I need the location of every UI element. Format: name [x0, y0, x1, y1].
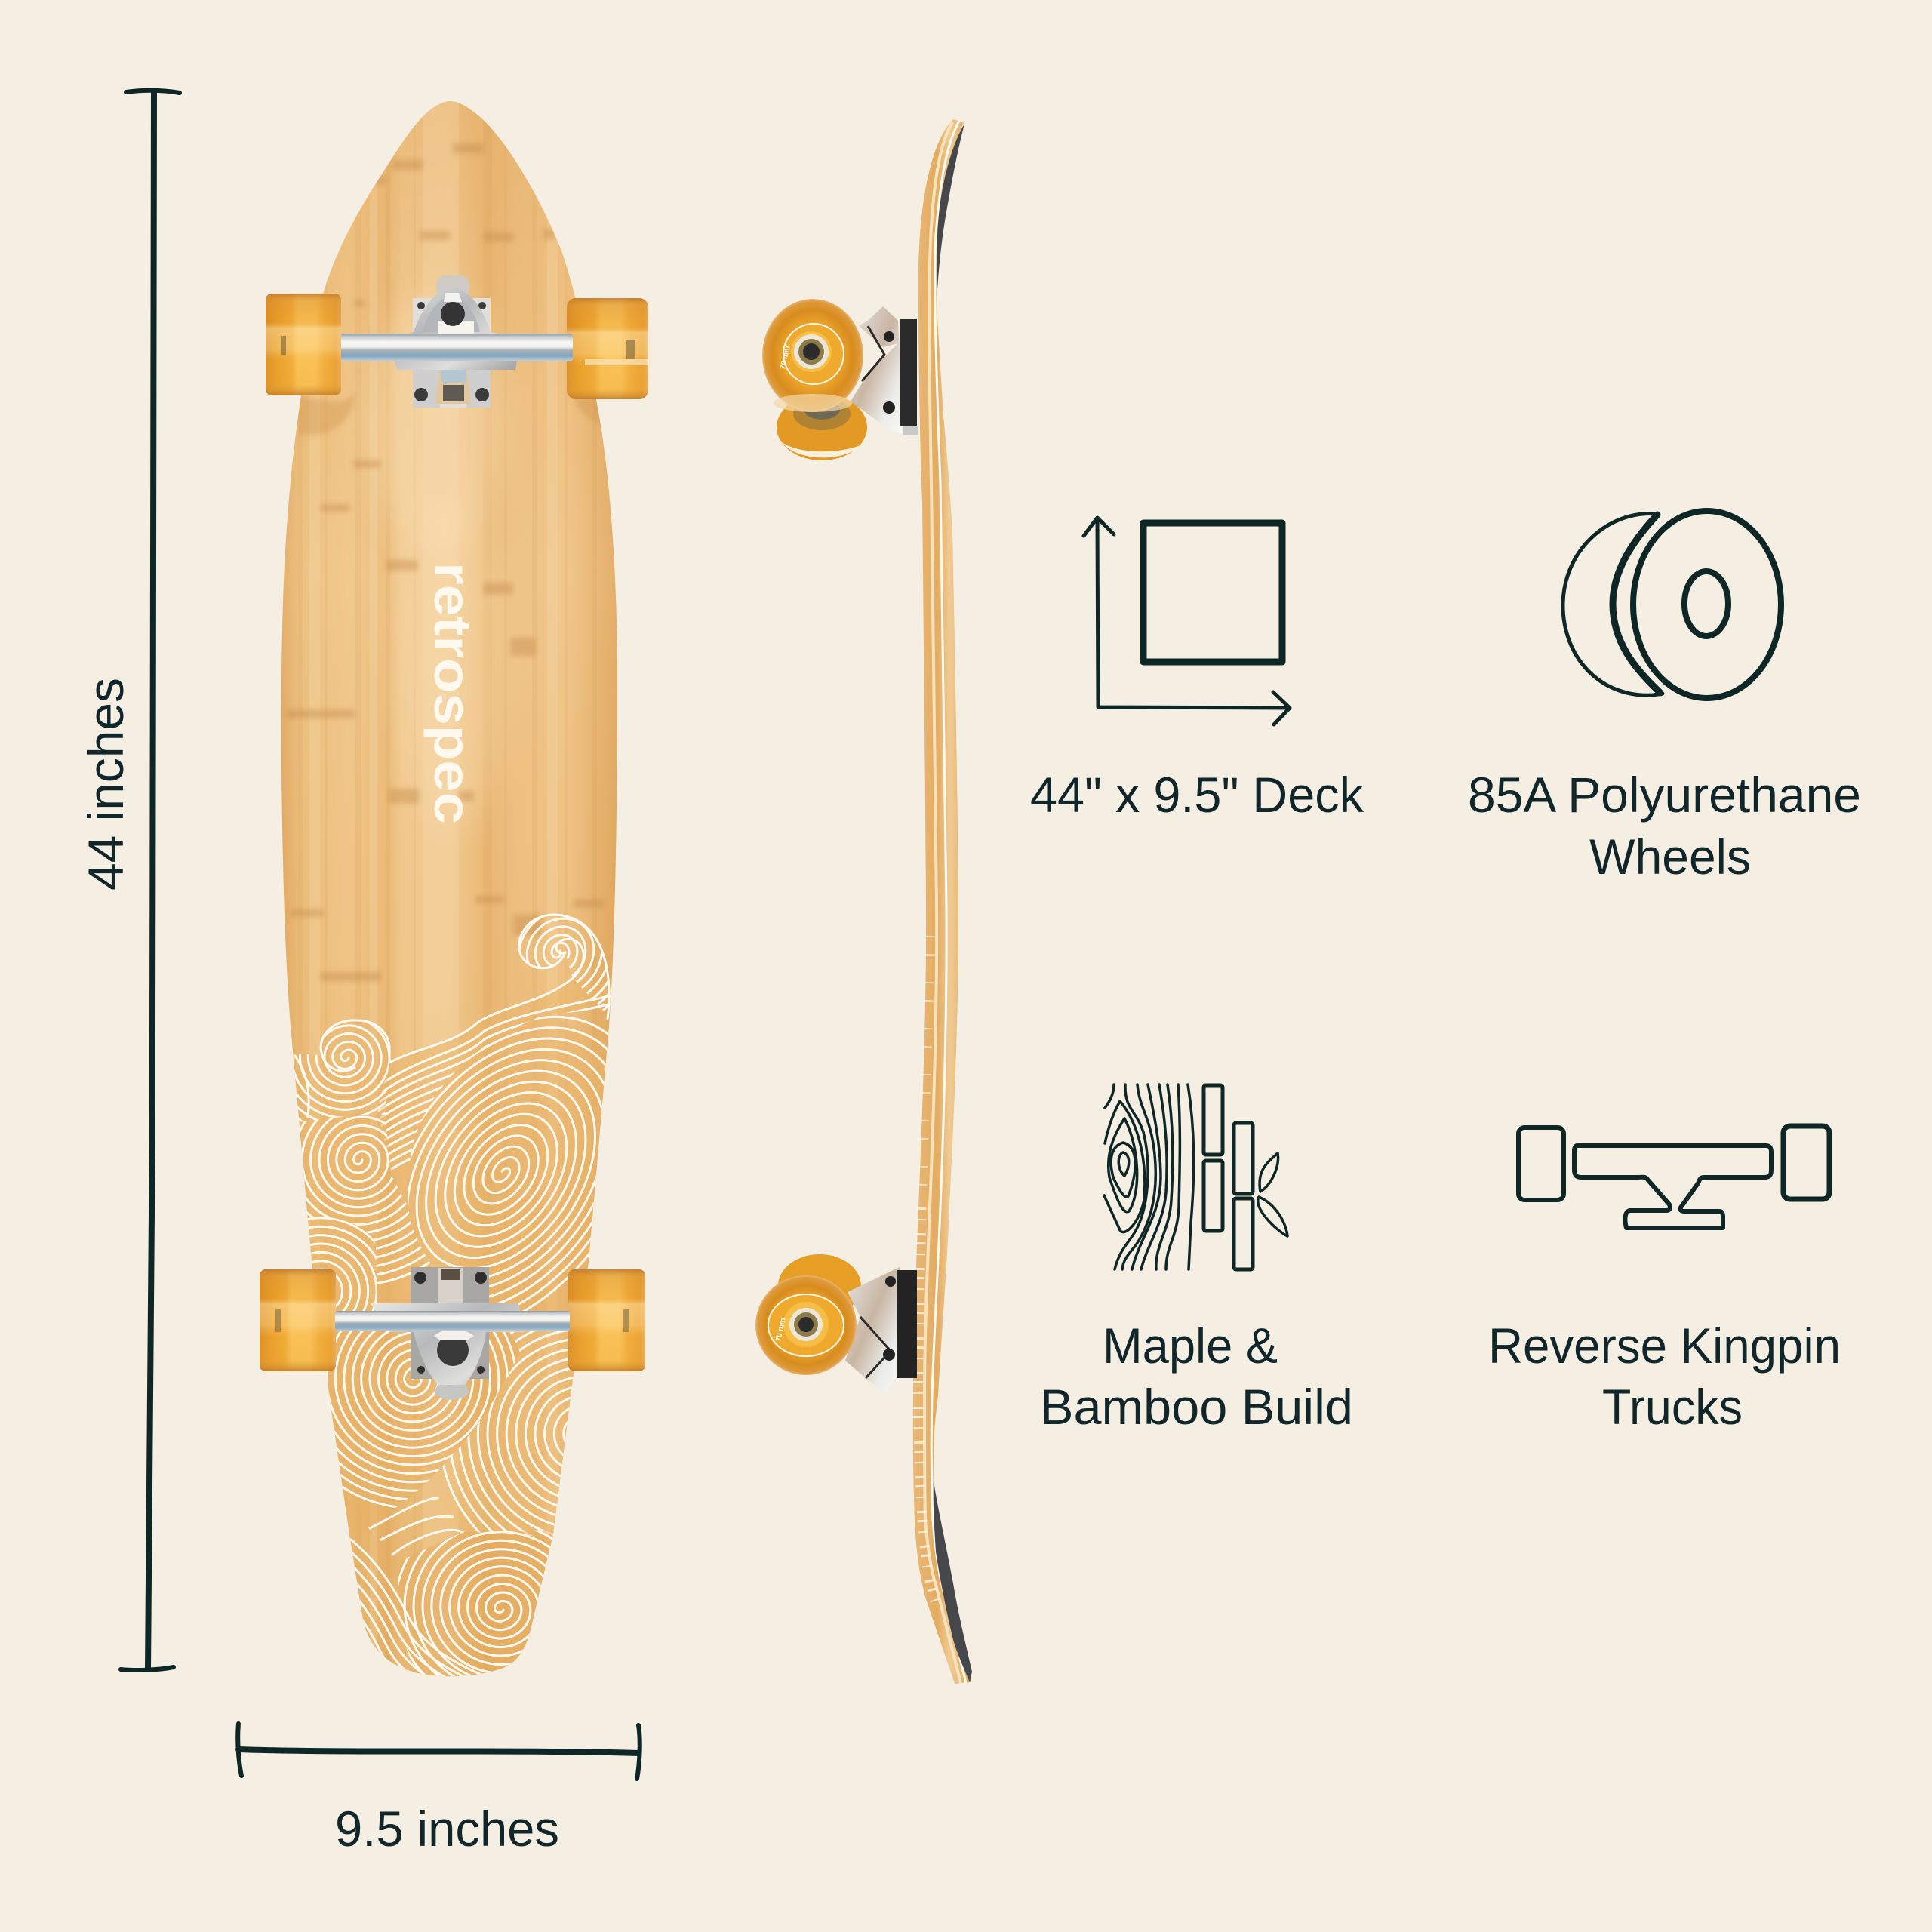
label: build: Maple & — [1103, 1318, 1278, 1374]
front wheel — [755, 1275, 857, 1375]
label: trucks: Trucks — [1602, 1379, 1743, 1435]
side deck wave print — [918, 936, 937, 1607]
riser pad — [897, 1270, 917, 1378]
deck with bamboo texture — [281, 101, 617, 1677]
label: 44 inches: 44 inches — [78, 678, 134, 891]
label: build: Bamboo Build — [1040, 1379, 1353, 1435]
riser pad — [900, 319, 917, 426]
label: build — [1040, 1318, 1353, 1435]
label: trucks: Reverse Kingpin — [1488, 1318, 1841, 1374]
bottom hanger and kingpin — [371, 1303, 524, 1400]
top side truck — [762, 299, 918, 460]
top left wheel — [266, 294, 341, 395]
bottom left wheel — [260, 1269, 336, 1371]
bottom side truck — [755, 1254, 917, 1394]
icon: deck dimensions — [1084, 518, 1290, 724]
icon: maple and bamboo — [1104, 1084, 1287, 1269]
vertical dimension line: 44 inches — [121, 91, 180, 1670]
top kingpin and hanger — [388, 275, 521, 370]
wave crest outline and tail — [295, 915, 609, 1117]
truck rub marks — [298, 392, 604, 435]
bamboo node marks — [287, 143, 604, 981]
front wheel: 70 mm — [774, 1317, 788, 1343]
lower left diagonal waves — [350, 1497, 481, 1677]
side deck profile — [913, 119, 971, 1684]
icon: truck — [1518, 1126, 1829, 1228]
logo: retrospec: retrospec — [423, 562, 481, 824]
label: trucks — [1488, 1318, 1841, 1435]
horizontal dimension line: 9.5 inches — [238, 1724, 640, 1779]
griptape bottom — [934, 1480, 972, 1682]
label: 9.5 inches: 9.5 inches — [335, 1801, 559, 1857]
bottom axle — [335, 1311, 570, 1331]
label: wheels — [1468, 767, 1861, 884]
longboard side view — [755, 119, 972, 1684]
top baseplate — [413, 298, 491, 408]
bottom right wheel — [568, 1269, 645, 1371]
rear wheel — [777, 394, 867, 460]
top truck and wheels — [266, 275, 648, 408]
longboard top view — [260, 101, 648, 1677]
bottom baseplate — [411, 1267, 489, 1379]
bottom truck and wheels — [260, 1267, 645, 1400]
label: deck size: 44" x 9.5" Deck — [1030, 767, 1364, 823]
icon: wheel — [1563, 511, 1781, 698]
rear wheel — [778, 1254, 861, 1318]
griptape top — [937, 124, 964, 290]
baseplate — [851, 306, 903, 435]
top axle — [341, 334, 573, 361]
front wheel — [762, 299, 863, 412]
front wheel: 70 mm — [779, 345, 792, 371]
label: wheels: 85A Polyurethane — [1468, 767, 1861, 823]
top right wheel — [567, 298, 648, 399]
baseplate — [845, 1267, 900, 1394]
wave artwork, white line swirls — [192, 780, 774, 1774]
label: wheels: Wheels — [1589, 829, 1751, 884]
